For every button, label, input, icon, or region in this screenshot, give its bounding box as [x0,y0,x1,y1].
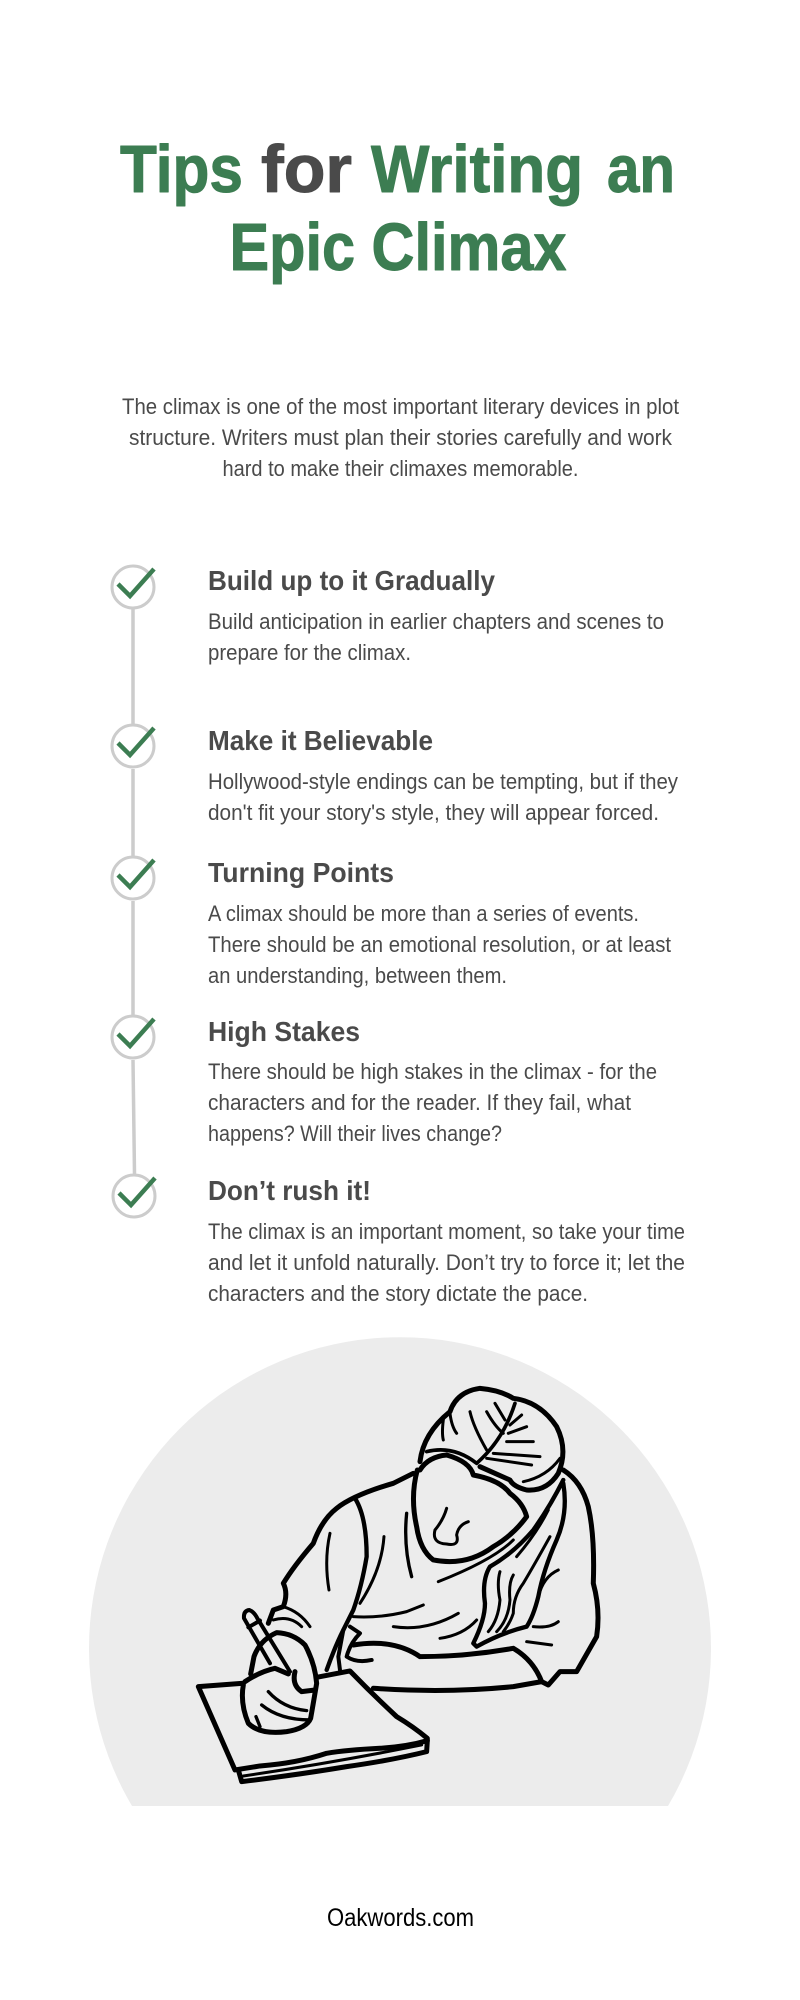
bun [420,1388,563,1490]
footer: website: Oakwords.com [327,1904,474,1932]
tip 4: characters and for the reader. If they fail, what [208,1090,631,1115]
tip 4 [208,1016,657,1146]
tip 4: There should be high stakes in the climax - for the [208,1059,657,1084]
tip 2 [208,725,678,825]
tip 2: don't fit your story's style, they will appear forced. [208,800,659,825]
grey circle backdrop [89,1337,711,1806]
paper [198,1671,427,1782]
head and face [406,1455,527,1577]
title: an [607,132,675,207]
tip 3: There should be an emotional resolution, or at least [208,932,671,957]
intro text: The climax is one of the most important literary devices in plot [122,394,679,419]
tip 5: Don’t rush it! [208,1175,371,1206]
intro text: structure. Writers must plan their stories carefully and work [129,425,673,450]
icon: check 1 [112,566,154,608]
tip 2: Make it Believable [208,725,433,756]
tip 1: Build up to it Gradually [208,565,495,596]
illustration: person writing [198,1388,598,1782]
tip 1 [208,565,664,665]
tip 5: and let it unfold naturally. Don’t try to force it; let the [208,1250,685,1275]
icon: check 5 [113,1175,155,1217]
tip 3: Turning Points [208,857,394,888]
title: Tips [120,132,243,207]
tip 3: an understanding, between them. [208,963,507,988]
sleeve and shoulder [268,1473,413,1670]
tip 1: Build anticipation in earlier chapters and scenes to [208,609,664,634]
title: Epic Climax [230,210,566,285]
tip 5: The climax is an important moment, so take your time [208,1219,685,1244]
title: for [261,132,352,207]
tip 3: A climax should be more than a series of events. [208,901,639,926]
intro text: hard to make their climaxes memorable. [222,456,578,481]
tip 3 [208,857,671,988]
tip 2: Hollywood-style endings can be tempting, but if they [208,769,678,794]
tip 4: happens? Will their lives change? [208,1121,502,1146]
tip 1: prepare for the climax. [208,640,411,665]
icon: check 2 [112,725,154,767]
title [120,132,675,285]
icon: check 4 [112,1016,154,1058]
tip 5 [208,1175,685,1306]
intro text [122,394,679,481]
long hair [438,1480,565,1647]
icon: check 3 [112,857,154,899]
tip 5: characters and the story dictate the pace. [208,1281,588,1306]
tip 4: High Stakes [208,1016,360,1047]
other arm and torso [338,1470,598,1690]
pencil [244,1610,290,1672]
title: Writing [371,132,583,207]
hand [242,1633,317,1732]
timeline connector [133,609,134,1174]
